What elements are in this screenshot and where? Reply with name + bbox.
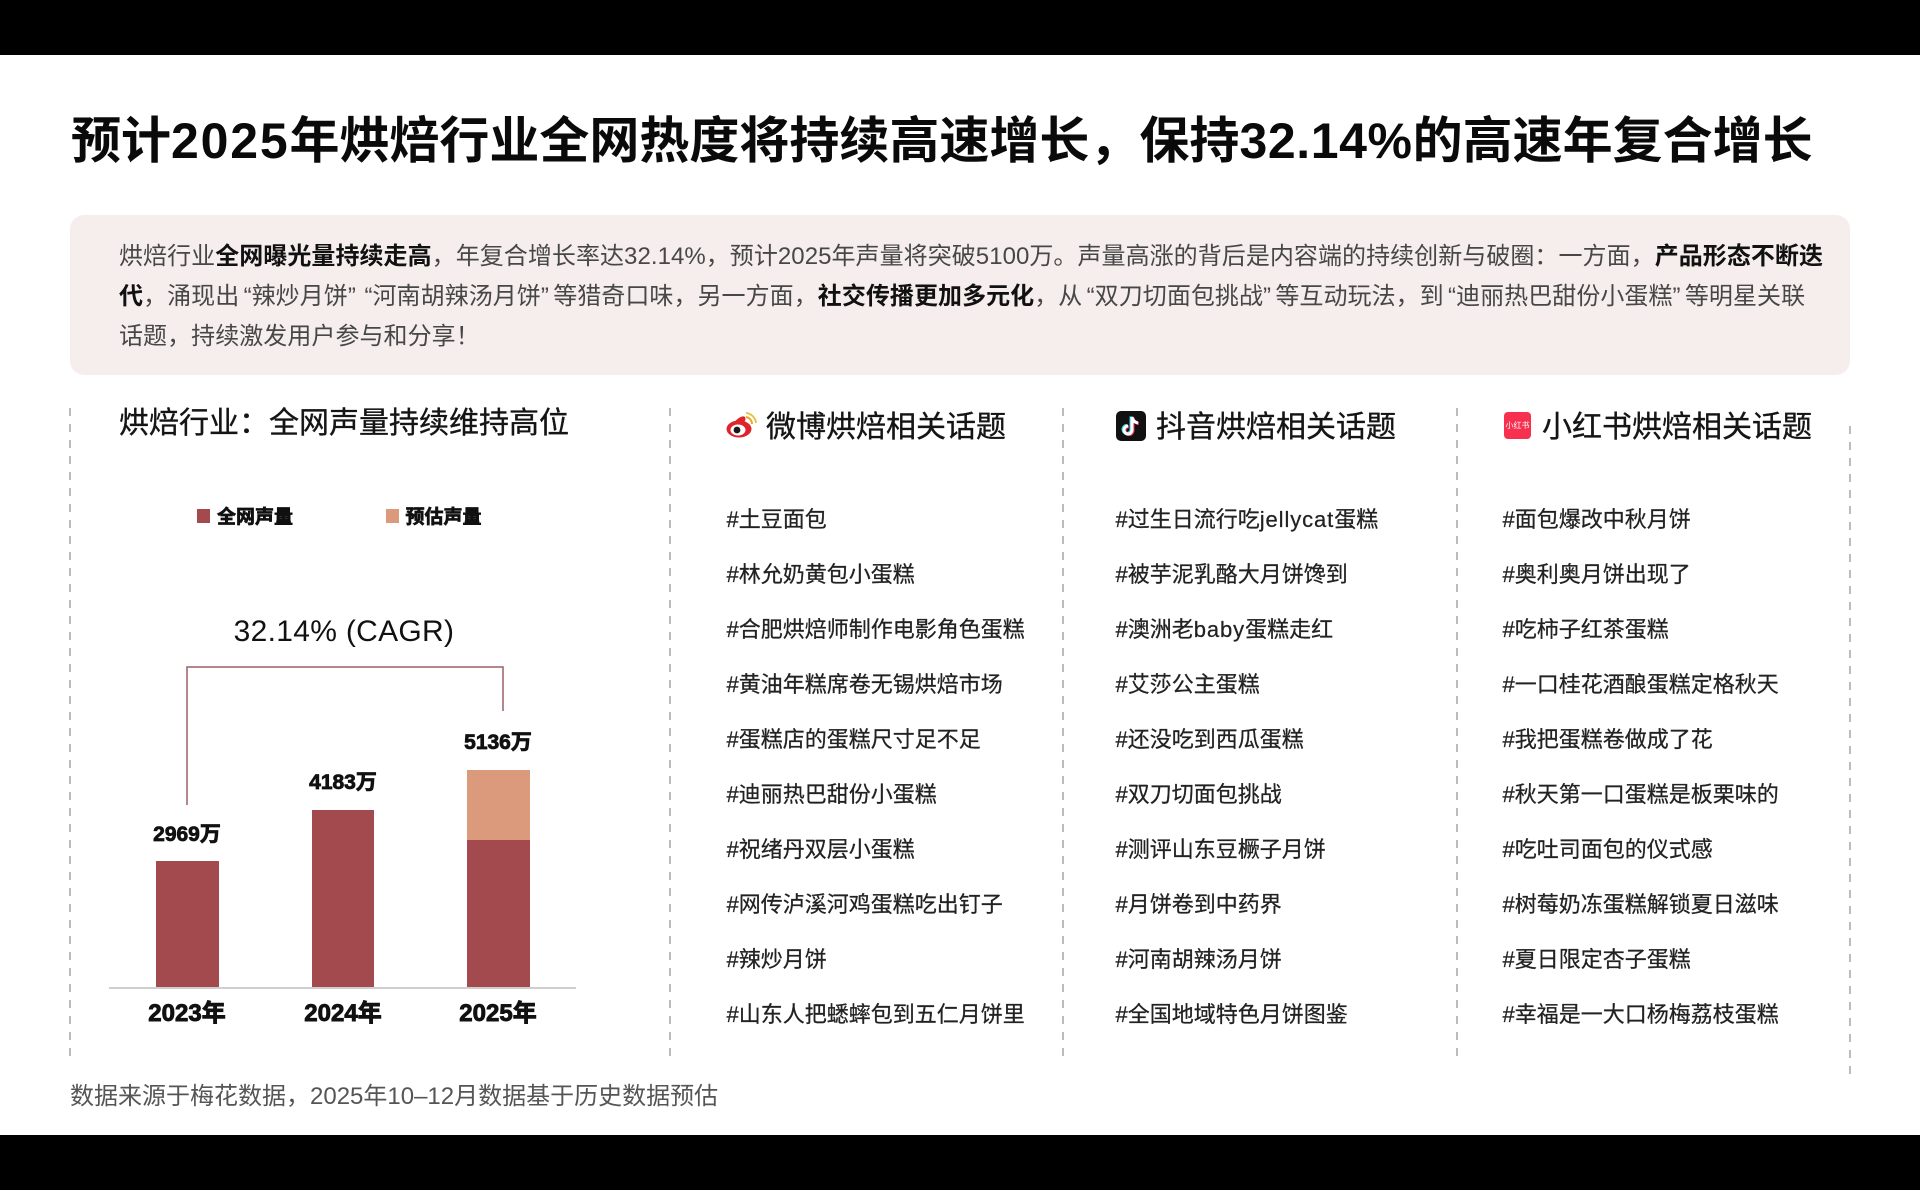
Douyin topic list: #测评山东豆橛子月饼 [1116, 836, 1326, 862]
Weibo topic list: #林允奶黄包小蛋糕 [726, 562, 915, 586]
year labels: 2025年 [459, 1000, 537, 1027]
Weibo topic list: #祝绪丹双层小蛋糕 [726, 836, 915, 862]
icon: Douyin [1116, 411, 1146, 441]
bar 2025 [467, 770, 530, 987]
Xiaohongshu heading: 小红书烘焙相关话题 [1542, 411, 1812, 444]
Xiaohongshu topic list [1502, 506, 1779, 1026]
Xiaohongshu topic list: #我把蛋糕卷做成了花 [1502, 726, 1713, 752]
Weibo topic list: #辣炒月饼 [726, 946, 827, 972]
Weibo topic list: #蛋糕店的蛋糕尺寸足不足 [726, 726, 981, 752]
Douyin heading: 抖音烘焙相关话题 [1156, 411, 1396, 444]
legend [197, 505, 482, 528]
Weibo topic list: #土豆面包 [726, 506, 827, 532]
bar 2024 [312, 810, 374, 987]
chart heading: 烘焙行业：全网声量持续维持高位 [119, 407, 569, 440]
Weibo topic list: #黄油年糕席卷无锡烘焙市场 [726, 672, 1003, 696]
Douyin topic list: #全国地域特色月饼图鉴 [1116, 1002, 1348, 1026]
Xiaohongshu topic list: #一口桂花酒酿蛋糕定格秋天 [1502, 672, 1779, 696]
summary line 1: 烘焙行业全网曝光量持续走高，年复合增长率达32.14%，预计2025年声量将突破5100万。声量高涨的背后是内容端的持续创新与破圈：一方面，产品形态不断迭 [119, 243, 1823, 270]
bar chart [109, 505, 576, 1027]
dashed column dividers [69, 408, 1851, 1074]
year labels: 2024年 [304, 1000, 382, 1027]
CAGR label: 32.14% (CAGR) [234, 615, 454, 648]
bar 2023 [156, 861, 219, 987]
Douyin topic list: #还没吃到西瓜蛋糕 [1116, 726, 1304, 752]
summary line 3: 话题，持续激发用户参与和分享！ [119, 323, 480, 350]
panel: bar chart column [109, 406, 576, 1027]
icon: Weibo [726, 412, 757, 438]
Weibo topic list [726, 506, 1025, 1026]
value labels: 4183万 [309, 771, 377, 794]
Weibo topic list: #山东人把蟋蟀包到五仁月饼里 [726, 1002, 1025, 1026]
Xiaohongshu topic list: #面包爆改中秋月饼 [1502, 506, 1691, 532]
footer source note: 数据来源于梅花数据，2025年10–12月数据基于历史数据预估 [70, 1083, 718, 1110]
axis [109, 987, 576, 989]
legend: 全网声量 [217, 505, 293, 528]
Xiaohongshu topic list: #幸福是一大口杨梅荔枝蛋糕 [1502, 1002, 1779, 1026]
value labels: 5136万 [464, 731, 532, 754]
year labels [148, 1000, 537, 1027]
panel: Xiaohongshu topics [1502, 411, 1812, 1026]
Douyin topic list: #被芋泥乳酪大月饼馋到 [1116, 562, 1348, 586]
icon: Xiaohongshu: 小红书 [1506, 421, 1530, 430]
panel: Weibo topics [726, 411, 1025, 1026]
Xiaohongshu topic list: #奥利奥月饼出现了 [1502, 562, 1691, 586]
Xiaohongshu topic list: #夏日限定杏子蛋糕 [1502, 946, 1691, 972]
Douyin topic list [1115, 506, 1378, 1026]
Xiaohongshu topic list: #吃柿子红茶蛋糕 [1502, 616, 1669, 642]
Douyin topic list: #月饼卷到中药界 [1116, 892, 1282, 916]
CAGR bracket [187, 667, 503, 805]
Douyin topic list: #双刀切面包挑战 [1116, 782, 1282, 806]
Xiaohongshu topic list: #吃吐司面包的仪式感 [1502, 836, 1713, 862]
value labels [153, 731, 532, 846]
bottom black bar [0, 1135, 1920, 1190]
panel: summary [70, 215, 1850, 375]
Xiaohongshu topic list: #秋天第一口蛋糕是板栗味的 [1502, 782, 1779, 806]
Weibo heading: 微博烘焙相关话题 [766, 411, 1006, 444]
Douyin topic list: #过生日流行吃jellycat蛋糕 [1116, 506, 1378, 532]
Douyin topic list: #河南胡辣汤月饼 [1116, 946, 1282, 972]
legend: 预估声量 [406, 506, 482, 528]
Weibo topic list: #网传泸溪河鸡蛋糕吃出钉子 [726, 892, 1003, 916]
Douyin topic list: #艾莎公主蛋糕 [1116, 672, 1260, 696]
Weibo topic list: #合肥烘焙师制作电影角色蛋糕 [726, 616, 1025, 642]
top black bar [0, 0, 1920, 55]
Xiaohongshu topic list: #树莓奶冻蛋糕解锁夏日滋味 [1502, 892, 1779, 916]
icon: Xiaohongshu [1504, 412, 1531, 439]
title: 预计2025年烘焙行业全网热度将持续高速增长，保持32.14%的高速年复合增长 [71, 113, 1813, 169]
panel: Douyin topics [1115, 411, 1396, 1026]
summary line 2: 代，涌现出“辣炒月饼” “河南胡辣汤月饼”等猎奇口味，另一方面，社交传播更加多元化，从“双刀切面包挑战”等互动玩法，到“迪丽热巴甜份小蛋糕”等明星关联 [119, 283, 1805, 310]
value labels: 2969万 [153, 823, 221, 846]
Douyin topic list: #澳洲老baby蛋糕走红 [1116, 616, 1333, 642]
Weibo topic list: #迪丽热巴甜份小蛋糕 [726, 782, 937, 806]
year labels: 2023年 [148, 1000, 226, 1027]
